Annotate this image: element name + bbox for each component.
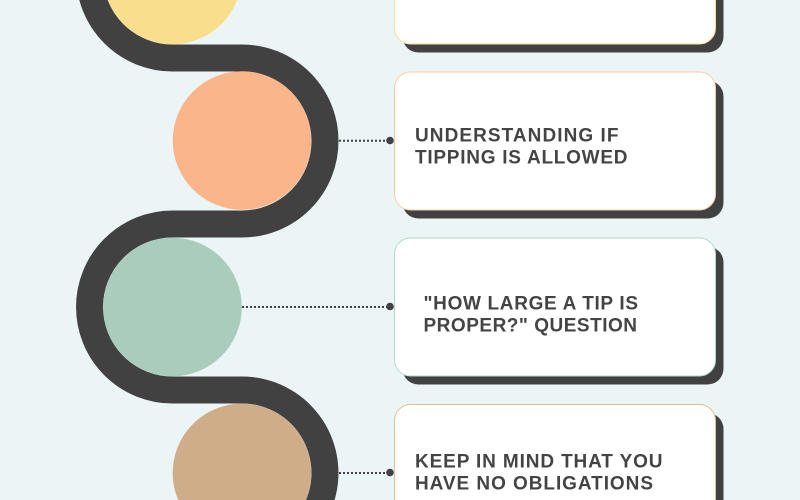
circle: peach step [173,71,311,210]
circle: green step [103,238,242,376]
card 2 text: TIPPING IS ALLOWED [415,148,628,168]
card 4 text: HAVE NO OBLIGATIONS [415,474,653,494]
card 2 text [415,126,628,168]
card 4: keep in mind no obligations [394,404,724,500]
card 3 text [424,294,638,336]
card 4 text [415,452,662,494]
card 3 text: PROPER?" QUESTION [424,316,637,336]
card 1: partially visible yellow card [394,0,724,52]
card 3 text: "HOW LARGE A TIP IS [424,294,638,314]
winding road path [90,0,338,500]
card 2 text: UNDERSTANDING IF [415,126,618,146]
card 3: how large a tip question [394,238,724,384]
card 2: understanding if tipping is allowed [394,72,724,218]
circle: tan step [173,404,311,500]
connector: tan circle to card [339,469,394,476]
connector: peach circle to card [339,137,394,144]
circle: yellow step [103,0,242,44]
card 4 text: KEEP IN MIND THAT YOU [415,452,662,472]
connector: green circle to card [242,303,394,310]
